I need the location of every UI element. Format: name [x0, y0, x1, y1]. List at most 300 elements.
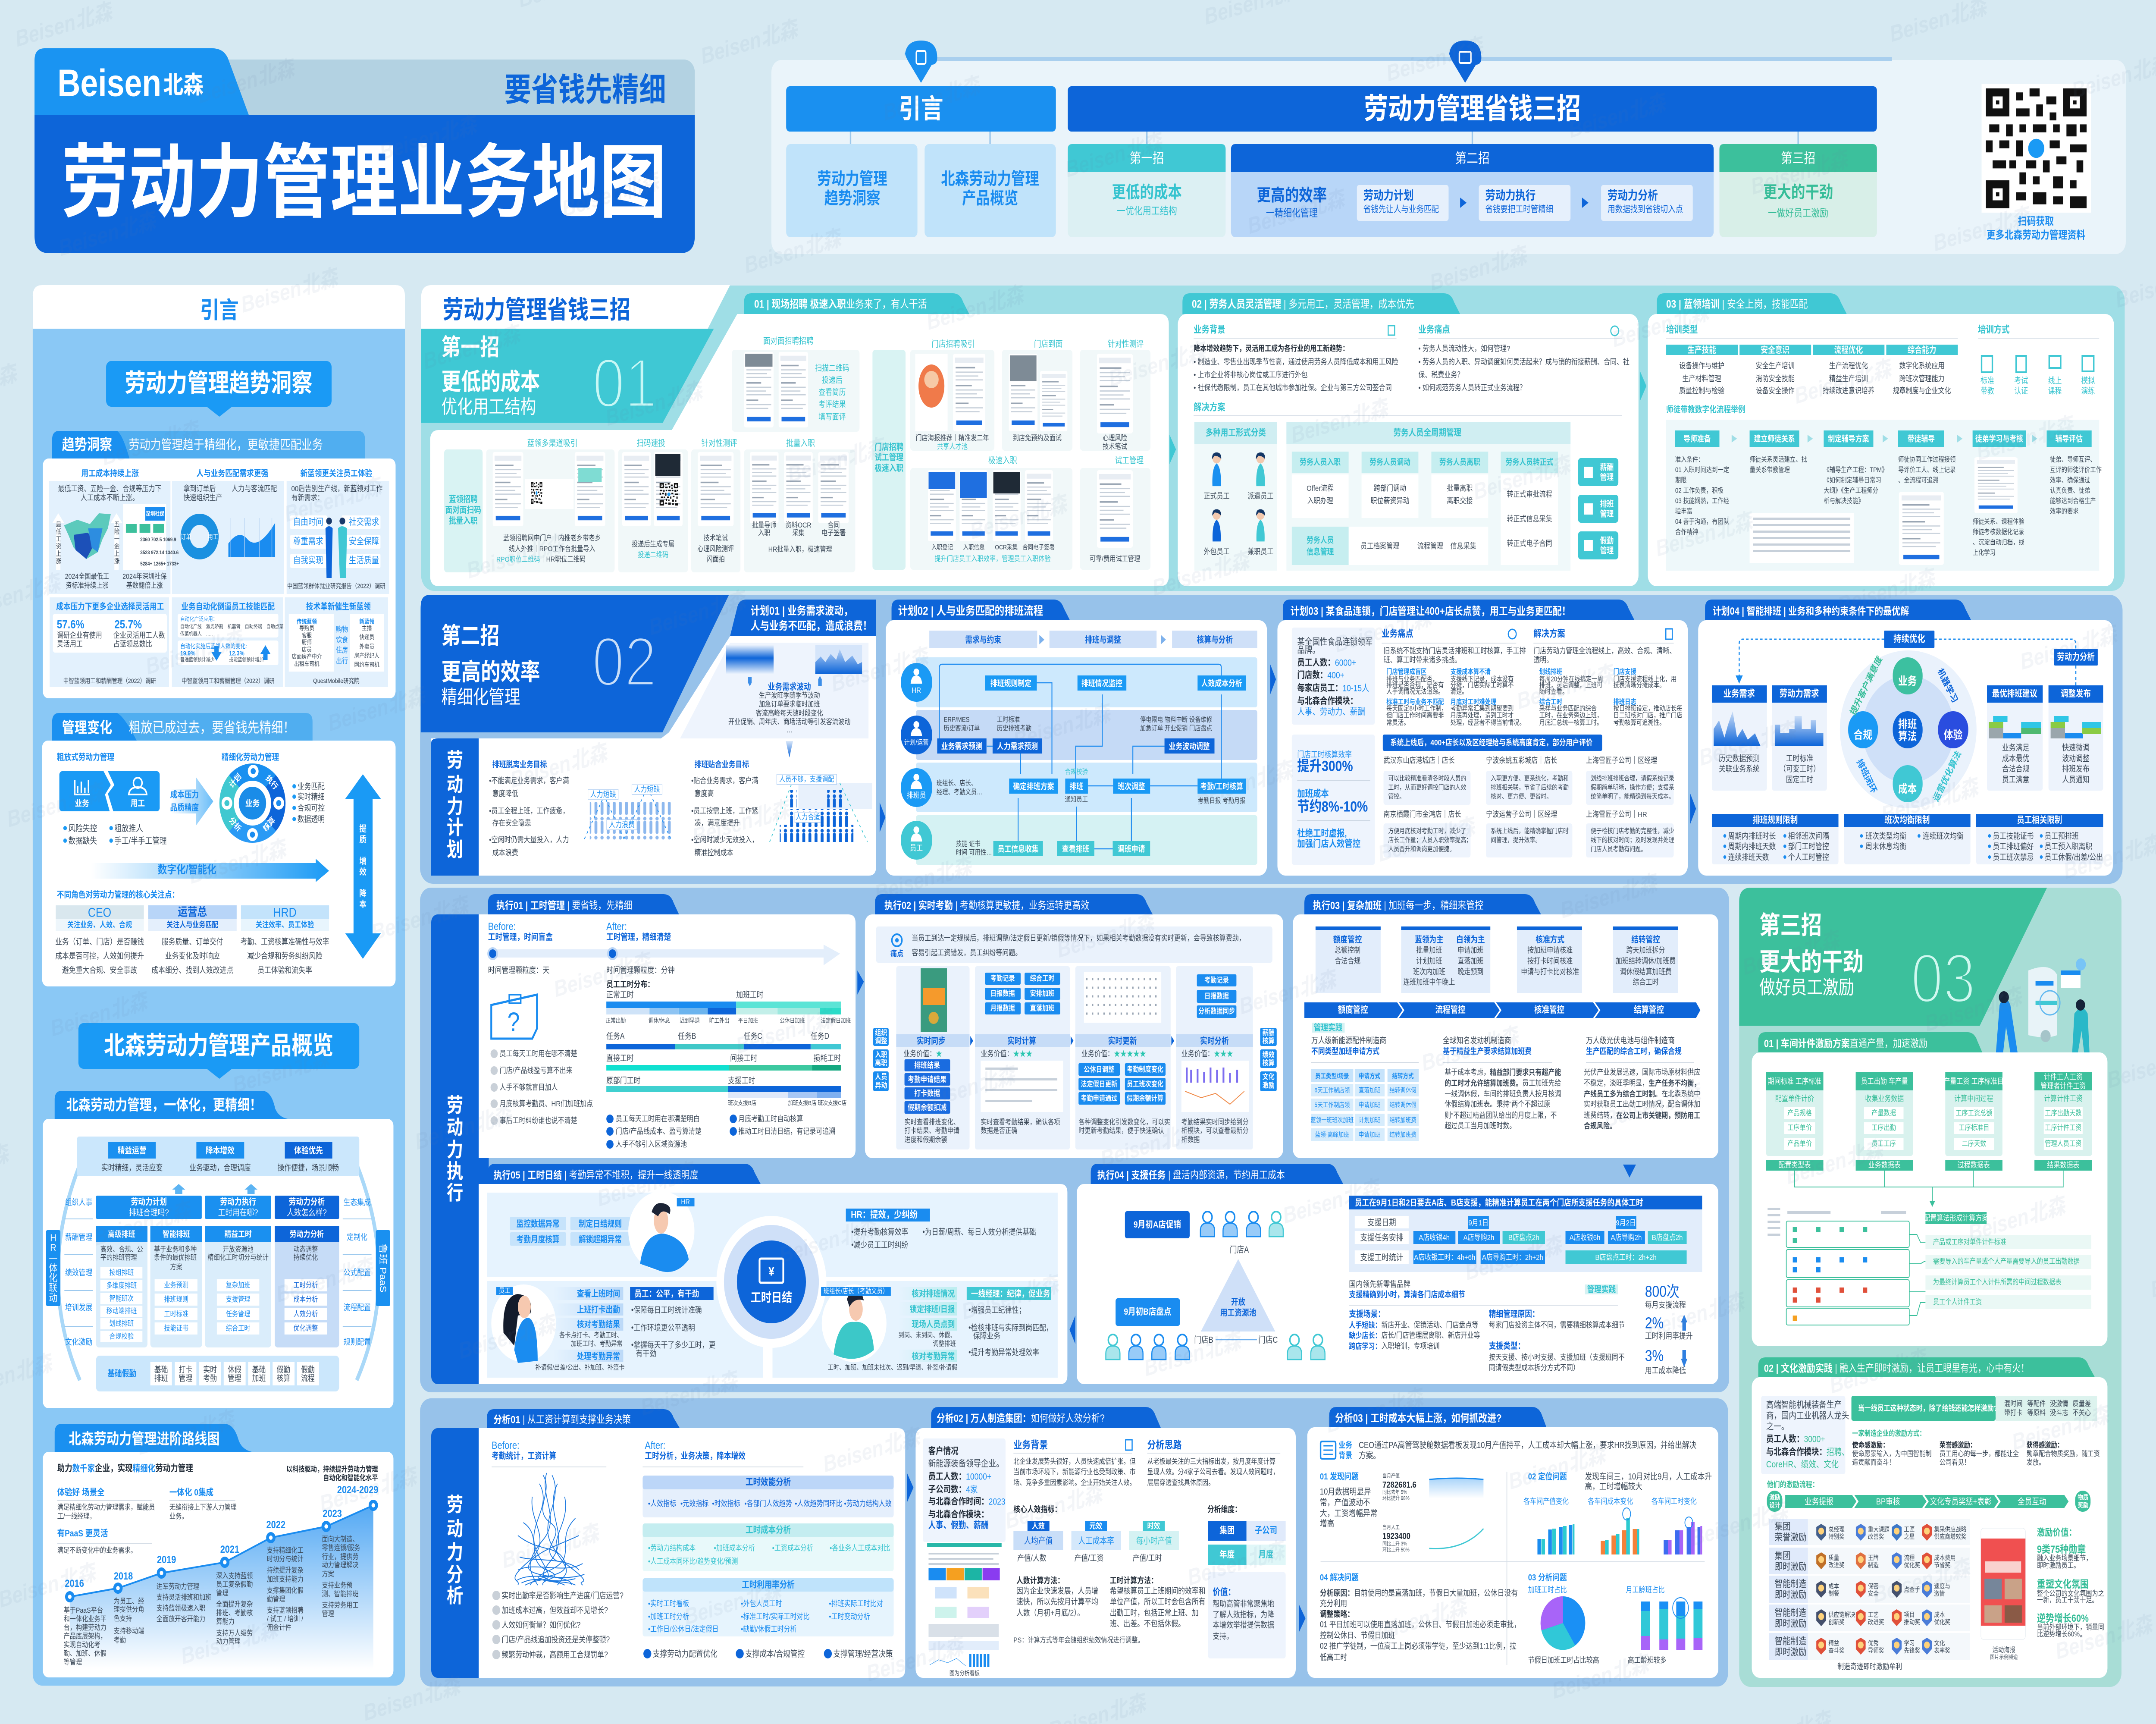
new collars block: 房产经纪人: [354, 652, 379, 659]
col 实时计算: 日报数据: [990, 989, 1015, 998]
on-target scheduling: 精准控制成本: [695, 848, 733, 857]
bg and thinking: 呈现人效。分4家子公司去看。发现人效问题时，: [1147, 1468, 1279, 1476]
crowd chart off target: 人力短缺: [634, 785, 660, 794]
quotes: 排班相关联，节省了后续的考勤: [1491, 783, 1569, 791]
customer info: 每家店员工：10-15人: [1297, 682, 1369, 693]
features: 无缝衔接上下游人力管理: [169, 1503, 237, 1511]
lifecycle table: 转正式审批流程: [1507, 490, 1552, 499]
new blue collar block: 安全保障: [349, 537, 379, 546]
new collars block: 店面房产中介: [291, 653, 322, 660]
hours distribution bars: 班次支援B店: [728, 1099, 756, 1106]
block: 第二招: 第二招: [441, 623, 499, 649]
left bar: 劳动力计划: 划: [447, 838, 463, 861]
social insurance table: 2360 702.5 1069.9: [140, 537, 176, 543]
constraints: 周期内排班时长: [1728, 831, 1776, 841]
columns: 配置单件计价: [1775, 1094, 1814, 1103]
nav sub: 劳动力执行: 劳动力执行: [1485, 189, 1536, 202]
left bar: 劳动力执行: 执: [447, 1160, 463, 1183]
04 解决问题: 分析原因：目前使用的是直落加班，节假日大量加班，公休日没有: [1320, 1588, 1518, 1598]
side tabs: 绩效: [1262, 1050, 1275, 1059]
tab 03: 03 | 蓝领培训 | 安全上岗，技能匹配: [1666, 298, 1808, 310]
value list: 整个公司的文化氛围为之: [2037, 1589, 2104, 1598]
card: 针对性测评: 闪面拍: [706, 555, 725, 563]
practice case 1: 员工类型/场景: [1315, 1072, 1349, 1080]
tab: 趋势洞察: 趋势洞察: [62, 436, 112, 453]
师徒流程: 01 入职时间达到一定: [1675, 466, 1729, 474]
01 发现问题: 常，产值波动不: [1320, 1498, 1370, 1507]
师徒流程: 、全流程可追溯: [1898, 476, 1938, 484]
icon: two workers: [326, 518, 347, 578]
col 实时更新: 实时更新: [1108, 1036, 1137, 1046]
employee side: [491, 1284, 715, 1372]
employee side: 处理考勤异常: [577, 1351, 620, 1361]
matching block: 人与业务匹配需求更强: [196, 468, 269, 478]
column: 精益工时: 任务管理: [226, 1310, 251, 1318]
automation block: 自动化实施后蓝领人数的变化:: [180, 643, 247, 650]
columns: 期间标准 工序标准: [1768, 1077, 1821, 1086]
flow notes: [937, 716, 1246, 857]
培训类型: 跨班次管理能力: [1899, 374, 1945, 383]
arrow: 提质增效降本: [345, 774, 381, 959]
demand fluctuation: 加急订单要求临时加班: [759, 700, 820, 708]
HR side: [510, 1191, 1036, 1272]
background: CEO通过PA高管驾驶舱数据看板发现10月产值持平，人工成本却大幅上涨，要求HR找到原因，并给出解决: [1359, 1440, 1696, 1450]
04 解决问题: 01 平日加班可以使用直落加班，公休日、节假日加班必须走审批，: [1320, 1620, 1520, 1629]
employee side: 查看上班时间: [577, 1289, 620, 1298]
customer info: 员工人数：6000+: [1297, 658, 1356, 668]
column: 劳动力分析: 成本分析: [294, 1295, 318, 1303]
new collars block: 购物: [336, 625, 348, 634]
panel: 蓝领培训: 师徒带教数字化流程举例: [1666, 405, 1745, 414]
pain point: 痛点: [890, 949, 903, 958]
practice case 1: 结转方式: [1392, 1072, 1414, 1080]
arrow: 数字化: [91, 859, 329, 882]
cost rise block: 低: [56, 528, 61, 535]
team leader side: 现场人员点到: [912, 1319, 955, 1329]
support table: 员工在9月1日和2日要去A店、B店支援，能精准计算员工在两个门店所支援任务的具体工时: [1355, 1198, 1643, 1207]
base attendance row: 核算: [276, 1373, 290, 1383]
hours distribution bars: 任务A: [606, 1031, 625, 1041]
core metrics: 时效: [1147, 1522, 1160, 1530]
heading button: 产品概览: 北森劳动力管理产品概览: [104, 1032, 333, 1060]
banner question: 没激情: [2050, 1400, 2068, 1408]
side tabs: 薪酬: [1262, 1029, 1275, 1037]
flexible labor block: 25.7%: [114, 618, 142, 631]
dimensions: 子公司: [1255, 1526, 1277, 1536]
hours distribution bars: 任务C: [744, 1031, 762, 1041]
analysis: utilization: 工时利用率分析: [742, 1580, 795, 1590]
support pool diagram: 门店B: [1194, 1335, 1213, 1344]
hours distribution bars: 员工工时分布：: [606, 980, 654, 989]
columns: 计算中间过程: [1954, 1094, 1993, 1103]
column: 智能排班: 工时标准: [164, 1310, 188, 1318]
flow nodes: 班次调整: [1118, 782, 1145, 791]
problems: 事后工时纠纷谁也说不清楚: [499, 1116, 577, 1125]
KPI block: 节约8%-10%: [1297, 798, 1368, 815]
matching block: 拿到订单后: [183, 484, 216, 493]
medal rows: 即时激励: [1775, 1647, 1806, 1658]
constraints: [1712, 814, 2103, 864]
process chevrons: 设计: [1769, 1501, 1780, 1509]
support table: A店收银工时：4h+6h: [1414, 1253, 1475, 1262]
bg and thinking: 北企业发展势头很好，人员快速成倍扩张。但: [1013, 1457, 1136, 1466]
customer info: [1292, 628, 1375, 725]
matching block: 订单: [181, 533, 191, 540]
side tabs: 人员: [875, 1073, 887, 1081]
process chevrons: 物质: [2078, 1493, 2088, 1501]
fine management bullets: 业务匹配: [298, 782, 325, 791]
培训类型: 设备安全操作: [1756, 386, 1795, 395]
problems: 月底核算考勤员、HR们加班加点: [499, 1099, 593, 1108]
medal rows: 项目: [1904, 1611, 1915, 1618]
培训方式 icons: 标准: [1981, 376, 1994, 385]
new collars block: QuestMobile研究院: [313, 677, 360, 685]
arrow: [1169, 435, 1176, 464]
timeline area chart: 2023: [323, 1507, 342, 1520]
cost rise block: 一: [114, 535, 119, 543]
col 实时同步: 进度和假期余额: [905, 1135, 947, 1144]
team leader side: •增强员工纪律性；: [968, 1305, 1025, 1315]
chevrons: 额度管控: [1338, 1004, 1368, 1015]
col 实时计算: 业务价值：★★★: [981, 1049, 1032, 1058]
tab 执行03: [1304, 894, 1541, 914]
medal rows: 即时激励: [1775, 1618, 1806, 1629]
medal rows: 成本费用: [1934, 1554, 1955, 1561]
col 实时计算: 数据是否正确: [981, 1127, 1017, 1135]
side tabs: 核算: [1262, 1058, 1275, 1067]
features: 满足精细化劳动力管理需求，赋能员: [57, 1503, 155, 1511]
01 发现问题: 环比提升 98%: [1382, 1495, 1410, 1501]
analysis: cost: •劳动力结构成本: [648, 1544, 696, 1552]
lifecycle table: 批量离职: [1447, 484, 1473, 493]
column: 劳动力分析: 优化调整: [294, 1324, 318, 1332]
new collars block: 主播: [362, 625, 372, 631]
解决方案: 解决方案: [1194, 402, 1225, 413]
incentive methods: 一家制造企业的激励方式：: [1852, 1429, 1925, 1438]
师徒流程: 辅导评估: [2055, 434, 2083, 443]
practice case 1: 结转调休假: [1389, 1101, 1416, 1109]
team leader side: 班组长/店长（考勤文员）: [824, 1287, 888, 1295]
pain list: 频繁劳动仲裁，高额用工合规罚单?: [501, 1650, 608, 1659]
loop dashed: [1739, 639, 2076, 685]
column: 精益工时: 精细化工时切分与统计: [207, 1253, 269, 1262]
side buttons: 管理: [1600, 546, 1614, 555]
side buttons: 薪酬: [1600, 462, 1614, 472]
tab 计划02: [892, 600, 1070, 620]
flow nodes: 员工信息收集: [998, 844, 1039, 854]
process heads: [929, 631, 1257, 648]
employee side: 员工：公平，有干劲: [634, 1289, 699, 1298]
quotes: 管控。: [1388, 792, 1405, 801]
left bar: 劳动力执行: 行: [447, 1182, 463, 1204]
value band: 精益运营: [118, 1146, 146, 1155]
medal rows: 智能制造: [1775, 1579, 1806, 1589]
flow nodes: 排班: [1069, 782, 1083, 791]
panel: 劳务人员灵活管理: [1178, 293, 1639, 586]
column: 智能排班: 智能排班: [163, 1229, 190, 1239]
card: 面对面招聘: 面对面招聘招聘: [763, 336, 814, 345]
constraints: 班次类型均衡: [1865, 831, 1906, 841]
03 分析问题: 高工龄班较多: [1628, 1656, 1667, 1664]
left bar: 劳动力分析: 力: [447, 1541, 463, 1564]
培训类型: 生产技能: [1687, 345, 1716, 355]
process heads: 核算与分析: [1197, 635, 1233, 644]
column: 智能排班: [150, 1226, 202, 1347]
improvements: 人手不够引入区域资源池: [616, 1140, 687, 1149]
lifecycle table: 信息管理: [1307, 547, 1334, 556]
card: 门店招聘: 门店到面: [1034, 339, 1063, 349]
KPI block: 杜绝工时虚报,: [1297, 828, 1347, 839]
module heads: 劳动力执行: [220, 1197, 256, 1206]
practice case 1: 申请方式: [1359, 1072, 1380, 1080]
improvements: 月底考勤工时自动核算: [738, 1115, 803, 1123]
师徒流程: 03 技能娴熟，工作经: [1675, 497, 1729, 505]
flow notes: 历史客流/订单: [943, 724, 980, 732]
problems: [491, 1049, 593, 1125]
support practice: 精细管理原因：: [1489, 1309, 1539, 1319]
before: 考勤统计，工资计算: [492, 1451, 556, 1460]
analysis: utilization: •外包人员工时: [741, 1599, 782, 1608]
tab 01: [1758, 1032, 1982, 1052]
培训类型: 精益生产培训: [1829, 374, 1868, 383]
block: 第一招: 更低的成本: [441, 368, 540, 395]
employee side: 上班打卡出勤: [577, 1305, 620, 1314]
card: 门店到面: [1002, 350, 1072, 451]
top columns: 申请加班: [1457, 946, 1483, 955]
role: 运营总: 运营总: [178, 906, 207, 919]
师徒流程: 带徒辅导: [1908, 434, 1935, 443]
process chevrons: [1767, 1491, 2090, 1512]
panel: 分析01: [479, 1409, 905, 1678]
tab 执行04: 执行04 | 支援任务 | 盘活内部资源，节约用工成本: [1097, 1169, 1285, 1181]
icon: pin intro: [905, 41, 937, 83]
04 解决问题: 低高工时: [1320, 1652, 1347, 1662]
practice case 1: 蓝领一班班次加班: [1310, 1116, 1354, 1124]
new blue collar block: 尊重需求: [293, 537, 323, 546]
timeline notes: 面向大制造、: [322, 1535, 358, 1543]
arrow: [1270, 664, 1276, 694]
banner question: 没斗志: [2050, 1409, 2068, 1417]
side tabs: 离职: [875, 1058, 887, 1067]
customer info: 商，国内工业机器人龙头: [1766, 1411, 1849, 1421]
timeline notes: 和一体化业务平: [64, 1615, 107, 1623]
role: CEO: 成本是否可控，人效如何提升: [55, 951, 144, 961]
pain points: 解决方案: [1533, 628, 1565, 639]
nav: 三招: [1068, 86, 1877, 132]
module heads: [96, 1196, 339, 1219]
constraints: 员工班次禁忌: [1993, 852, 2034, 862]
constraints: 周末休息均衡: [1865, 842, 1906, 851]
top columns: 按加班申请核准: [1527, 946, 1573, 955]
after: 工时分析，业务决策，降本增效: [645, 1451, 746, 1460]
tab: 路线图: 北森劳动力管理进阶路线图: [69, 1430, 220, 1448]
banner question: 不关心: [2073, 1409, 2091, 1417]
quotes: 核对、更方便、更省时。: [1491, 792, 1552, 801]
col 实时同步: 排班结果: [914, 1061, 940, 1070]
column: 劳动力分析: 持续优化: [294, 1253, 318, 1262]
quotes: 店长工作量；人员入职效率提高；: [1388, 836, 1472, 844]
dimensions: 集团: [1219, 1526, 1235, 1536]
role: CEO: 业务（订单、门店）是否赚钱: [55, 937, 144, 946]
col 实时更新: 法定假日更新: [1081, 1080, 1118, 1088]
hours distribution bars: [606, 980, 851, 1106]
medal rows: 重大课题: [1868, 1525, 1890, 1533]
业务痛点: • 劳务人员的入职、异动调度如何灵活起来？成与销的衔接薪酬、合同、社: [1418, 358, 1630, 366]
practice case 1: 直落加班: [1359, 1086, 1380, 1094]
banner question: 当一线员工这种状态时，除了给钱还能怎样激励?: [1858, 1404, 1998, 1413]
nav sub: 劳动力分析: 用数据找到省钱切入点: [1608, 204, 1683, 214]
card: 路线图: 自动化和智能化水平: [323, 1473, 378, 1482]
left linked modules: 薪酬管理: [65, 1232, 92, 1242]
left bar: 劳动力执行: 劳: [447, 1094, 463, 1117]
support practice: 按天支援、按小时支援、支援加班（支援班同不: [1489, 1353, 1625, 1362]
practice case 1: 万人级新能源配件制造商: [1311, 1036, 1386, 1045]
KPI column: 工时利用率提升: [1645, 1331, 1693, 1341]
demand fluctuation: [680, 643, 868, 757]
tab 分析03: [1329, 1407, 1546, 1427]
hours distribution bars: 调休/休息: [649, 1017, 670, 1024]
card: 极速入职: OCR采集: [995, 543, 1018, 551]
top columns: 按打卡时间核准: [1527, 957, 1573, 965]
practice case 3: 光伏产业发展迅速，国际市场原材料供应: [1584, 1068, 1700, 1077]
arrow: cost pressure: 品质精度: [170, 803, 199, 812]
side buttons: 排班: [1600, 499, 1614, 509]
tab 01: [744, 293, 969, 314]
pain points: 排班，灵活调整，上班可: [1539, 681, 1602, 689]
pain point: 当员工到达一定规模后，排班调整/法定假日更新/销假等情况下，如果相关考勤数据没有实时更新，会导致核算费劲，: [912, 934, 1245, 942]
师徒流程: 效率、确保通过: [2050, 476, 2090, 484]
medal rows: 集团: [1775, 1521, 1791, 1532]
timeline area chart: 2021: [220, 1543, 239, 1555]
role: CEO: CEO: [88, 905, 111, 920]
cost rise block: 涨: [56, 557, 61, 565]
QR caption: [1987, 215, 2085, 241]
panel: 分析03: [1307, 1407, 1718, 1678]
pain points: 排班是否合规，是否有: [1386, 681, 1444, 689]
timeline area chart: 2024-2029: [337, 1484, 378, 1496]
hours distribution bars: 损耗工时: [814, 1053, 841, 1063]
block: 第一招: 优化用工结构: [441, 396, 536, 418]
KPI block: 加班成本: [1297, 788, 1329, 799]
lifecycle table: 跨部门调动: [1374, 484, 1406, 493]
业务背景: [1194, 324, 1398, 392]
heading: 省钱三招: 劳动力管理省钱三招: [443, 296, 630, 324]
card: 极速入职: 提升门店员工入职效率，管理员工入职体验: [934, 555, 1051, 563]
analysis: utilization: •加班工时分析: [648, 1612, 689, 1621]
donut: business cycle: 分析: [228, 815, 243, 833]
师徒流程: 合作精神: [1675, 528, 1698, 536]
column: demand: 业务需求: [1724, 688, 1755, 699]
card: 多渠道吸引: 线人外推｜RPO工作台批量导入: [509, 545, 595, 553]
section: 劳动力执行: [420, 888, 1729, 1392]
value list: 逆势增长60%: [2037, 1612, 2089, 1624]
constraints: 员工预排班: [2044, 831, 2079, 841]
base attendance row: 假勤: [276, 1365, 290, 1374]
side buttons: 假勤: [1600, 536, 1614, 545]
培训类型: 流程优化: [1834, 345, 1863, 355]
worker figures: 派遣员工: [1247, 492, 1273, 500]
hours distribution bars: 旷工外出: [709, 1017, 729, 1024]
panel: 蓝领培训: [1648, 293, 2114, 586]
module heads: 劳动力分析: [289, 1197, 325, 1206]
support practice: 国内领先新零售品牌: [1349, 1279, 1410, 1289]
card: 批量入职: 合同: [827, 521, 840, 529]
practice case 1: 蓝领-高峰加班: [1315, 1130, 1349, 1138]
lifecycle table: 职位薪资异动: [1371, 496, 1410, 505]
role: HRD: 减少合规和劳务纠纷风险: [247, 951, 323, 961]
tab 执行01: 执行01 | 工时管理 | 要省钱，先精细: [496, 899, 632, 911]
support practice: 每家门店投资主体不同，需要精细核算成本细节: [1489, 1321, 1625, 1329]
timeline notes: 支持精细化工: [267, 1546, 304, 1554]
columns: 配置类型表: [1778, 1161, 1811, 1169]
KPI block: 加强门店人效管控: [1297, 838, 1360, 849]
column: optimal schedule: 最优排班建议: [1992, 689, 2037, 699]
quotes: [1384, 756, 1674, 857]
quotes: 间管理，提升效率。: [1491, 836, 1541, 844]
pain points: 门店支援: [1613, 667, 1636, 676]
section: 第一招: [421, 285, 2125, 591]
flow notes: 合规校验: [1065, 768, 1088, 776]
new collars block: 网约车司机: [354, 661, 379, 668]
block: 蓝领招聘: 蓝领招聘: [449, 494, 478, 504]
column: 精益工时: 开放资源池: [223, 1245, 254, 1253]
timeline notes: [64, 1535, 360, 1666]
HR side: •提升考勤核算效率: [851, 1227, 908, 1237]
left linked modules: [64, 1197, 93, 1347]
block: 门店招聘: 试工管理: [874, 452, 903, 462]
on-target scheduling: •员工按需上班，工作紧: [691, 807, 758, 815]
column: optimal schedule: [1987, 685, 2043, 791]
value band: 降本增效: [206, 1146, 235, 1155]
improvements: [606, 1115, 835, 1149]
tab 02: [1182, 293, 1460, 314]
value list: 当前外部环境下，销量同: [2037, 1623, 2104, 1631]
HR side: •为日薪/周薪、每日人效分析提供基础: [922, 1227, 1036, 1237]
new blue collar block: 新蓝领更关注员工体验: [300, 468, 373, 478]
panel: 执行02: [865, 894, 1283, 1158]
incentive methods: 勋章配合物质奖励，随工资: [2027, 1450, 2100, 1458]
new collars block: 出行: [336, 657, 348, 665]
off-target scheduling: •空闲时仍需大量投入，人力: [489, 835, 569, 844]
donut: business cycle: 核算: [261, 815, 276, 833]
columns: 员工工序: [1871, 1140, 1896, 1148]
card: 扫码速投: 投递后生成专属: [632, 540, 674, 548]
arrow: 提质增效降本: 效: [359, 867, 367, 876]
constraints: 周期内排班天数: [1728, 842, 1776, 851]
crowd chart off target: 人力浪费: [609, 820, 635, 829]
off-target scheduling: •不能满足业务需求，客户满: [489, 776, 569, 785]
04 解决问题: 02 推广学徒制，一位高工上岗必须带学徒，至少达到1:1比例，拉: [1320, 1641, 1517, 1651]
customer info: [1761, 1396, 1849, 1474]
analysis: efficiency: •劳动力结构人效: [844, 1499, 892, 1508]
crowd chart on target: [770, 774, 872, 842]
role: 计划运营: 计划/运营: [904, 738, 929, 747]
timeline notes: 全面提升复杂: [216, 1600, 253, 1608]
pain points: 透明。: [1533, 656, 1553, 664]
role: CEO: 避免重大合规、安全事故: [62, 965, 137, 975]
base attendance row: 排班: [154, 1373, 168, 1383]
block: 第二招: 更高的效率: [441, 659, 540, 685]
培训类型: [1666, 324, 2099, 395]
tab 执行01: [488, 894, 679, 914]
lifecycle table: 转正式电子合同: [1507, 539, 1552, 548]
业务痛点: 业务痛点: [1418, 324, 1450, 335]
base attendance row: 打卡: [179, 1365, 192, 1374]
lifecycle table: Offer流程: [1307, 484, 1334, 493]
col 实时更新: [1075, 966, 1171, 1149]
flow nodes: 业务波动调整: [1169, 741, 1210, 751]
01 发现问题: 环比上升 50%: [1382, 1547, 1410, 1553]
